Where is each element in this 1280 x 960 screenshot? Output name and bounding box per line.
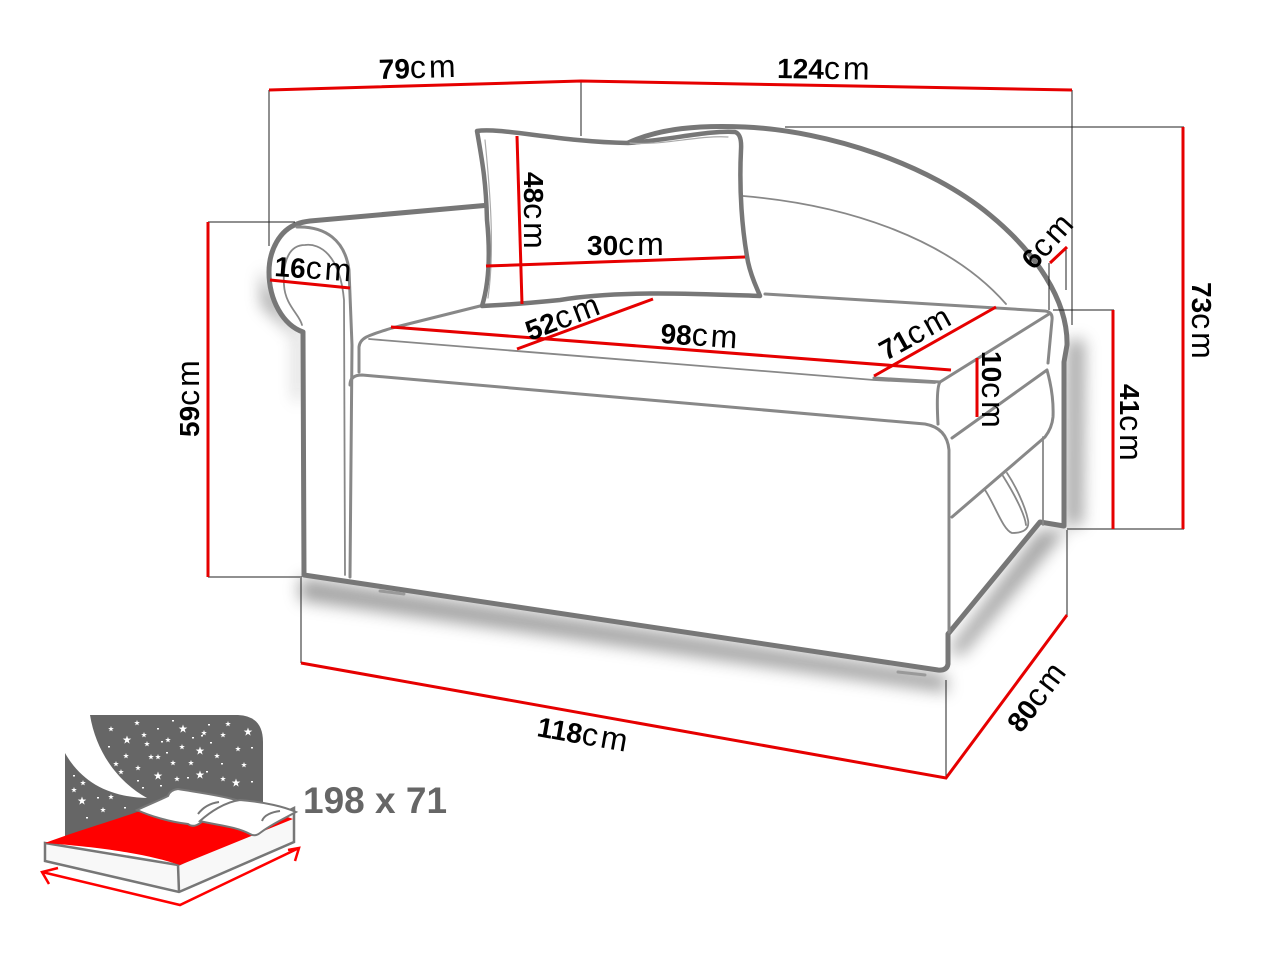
pillow fold lines [485,137,728,298]
icon: stars [71,720,253,818]
label: 118cm: 118cm [535,707,633,759]
label: 10cm: 10 cm [975,351,1011,431]
black leader lines [208,82,1184,778]
pillow [477,130,760,306]
icon: red sheet [45,800,293,865]
icon: mattress [45,808,294,892]
label: 98cm: 98cm [660,314,742,356]
label: 6cm: 6cm [1012,204,1082,276]
label: 124cm: 124cm [777,49,873,87]
bed size icon [42,715,299,905]
label: 71cm: 71cm [872,297,959,367]
label: 79cm: 79cm [378,48,459,86]
back curve and pull strap [743,196,1043,533]
label: 52cm: 52cm [520,285,607,348]
red dimension lines [208,81,1183,778]
seat cushion lines [350,294,1053,632]
label: 48cm: 48 cm [517,172,553,252]
label: 73cm: 73 cm [1185,282,1221,362]
bed size label: 198 x 71 [303,780,447,821]
label: 16cm: 16cm [274,247,356,289]
label: 30cm: 30cm [587,226,667,262]
label: 59cm: 59cm [170,357,206,437]
sofa outer outline [269,126,1067,670]
label: 80cm: 80cm [998,653,1075,738]
label: 41cm: 41 cm [1113,384,1149,464]
icon: red size arrows [42,848,299,905]
arm roll inner lines [284,227,352,577]
sofa feet [380,591,925,675]
icon: night sky [65,715,263,842]
sofa line drawing [269,126,1067,675]
icon: pillows [137,789,296,835]
sofa drop shadow [262,270,1084,692]
